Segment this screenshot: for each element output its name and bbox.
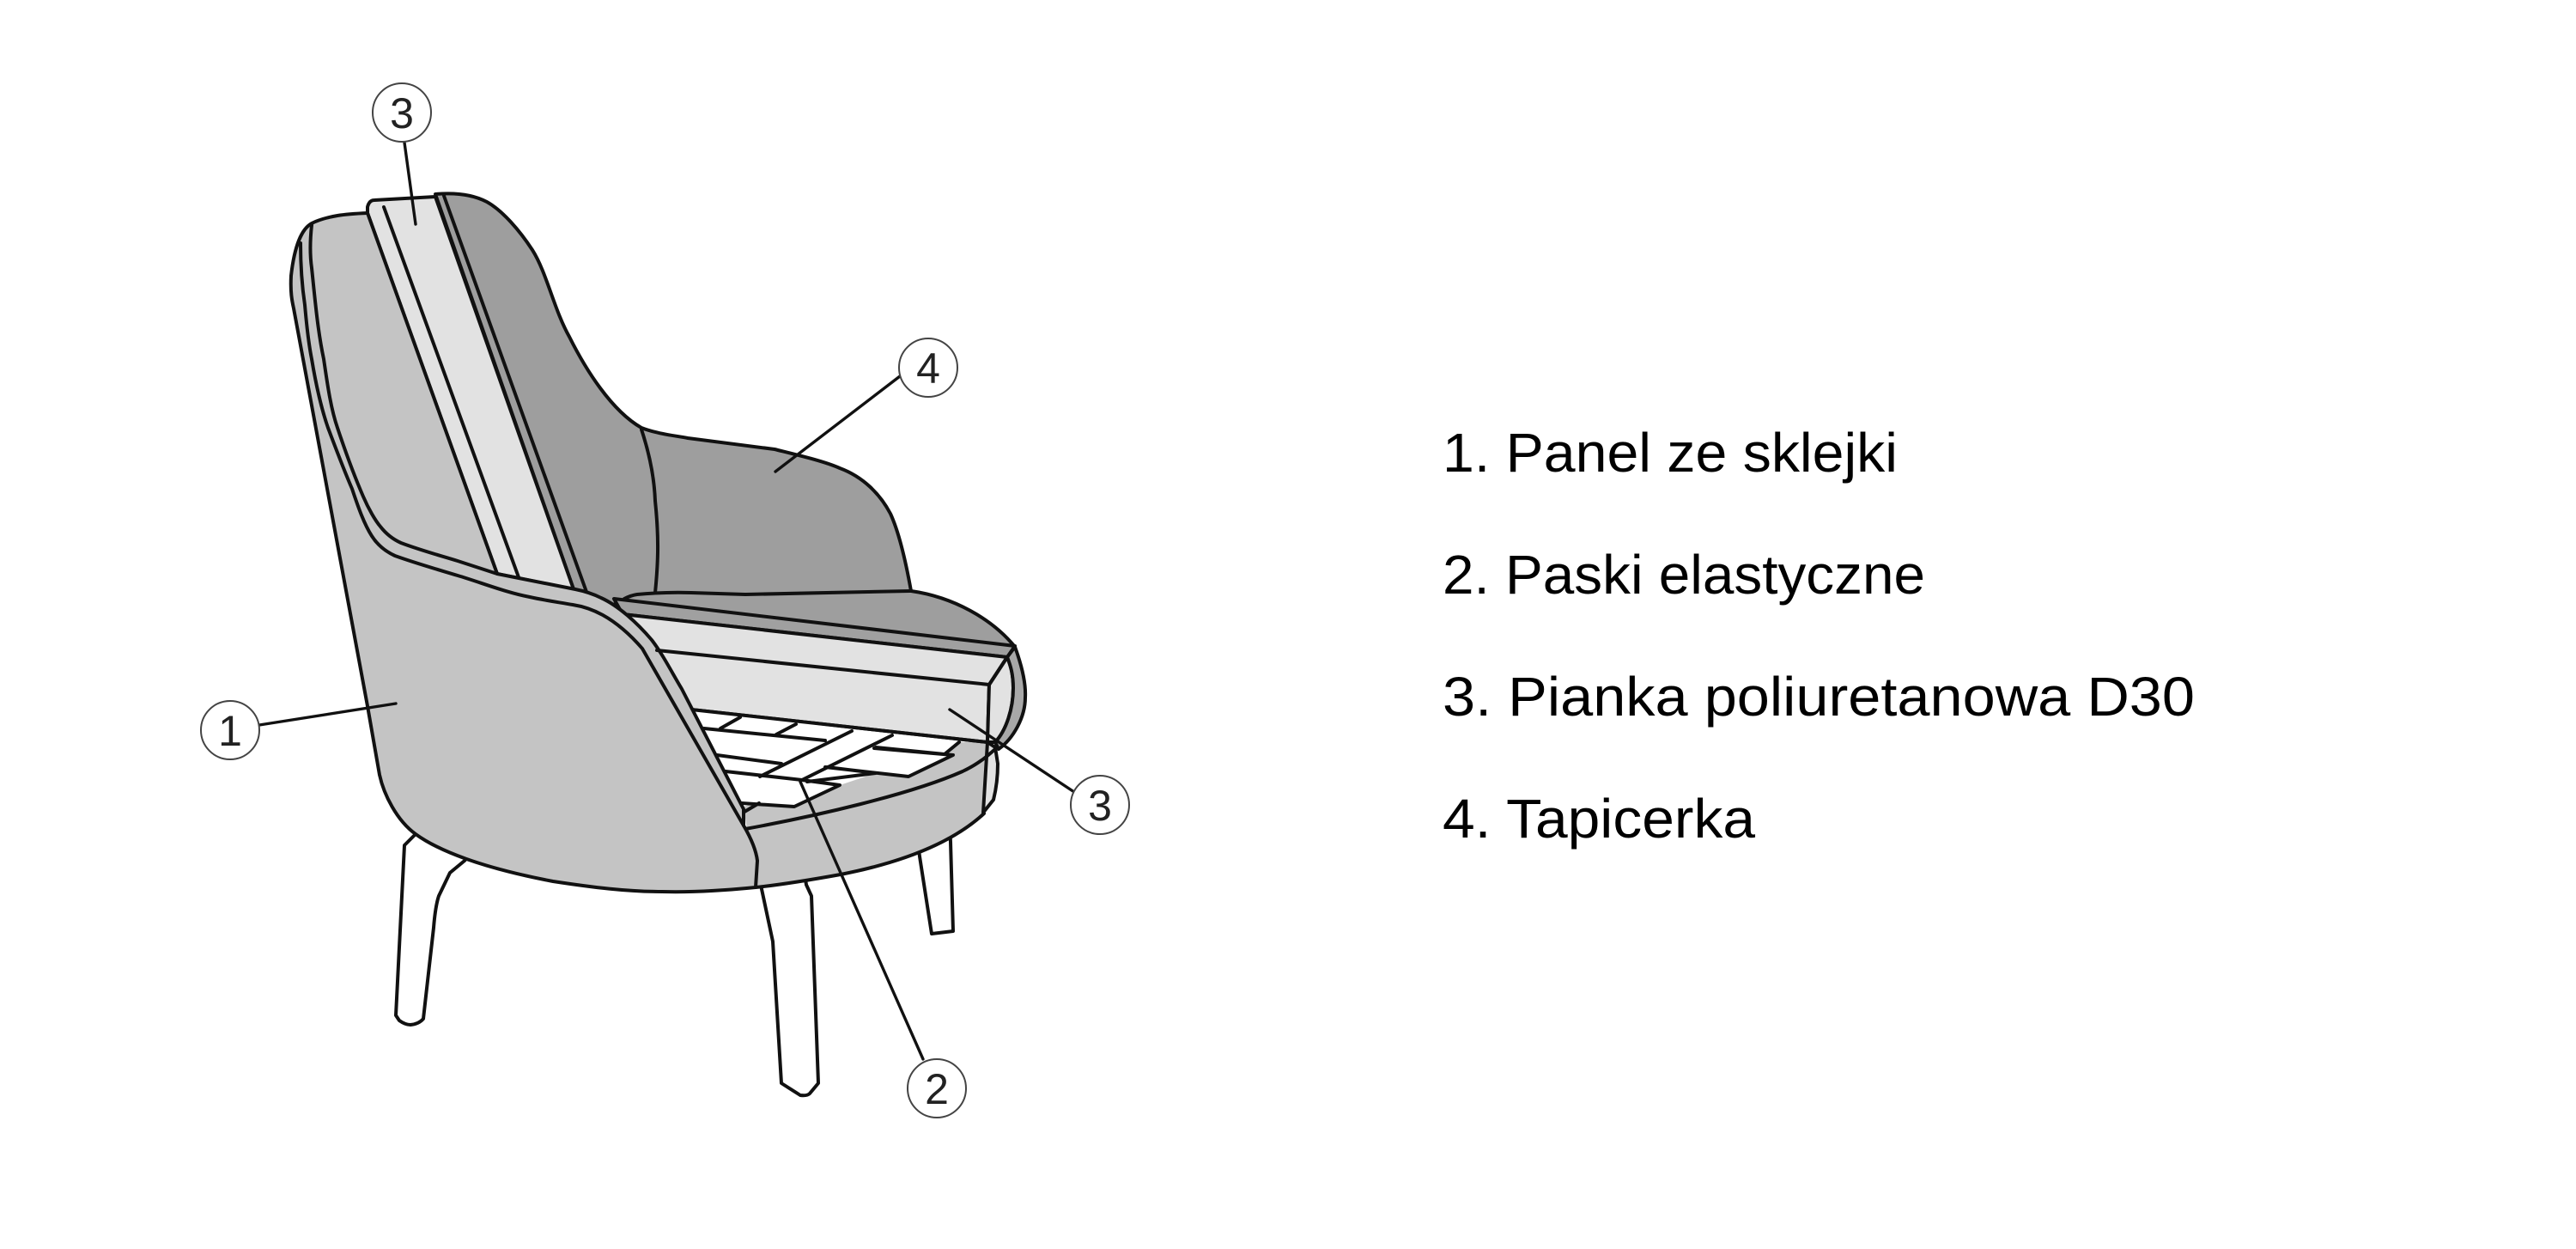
side upholstery strip [995, 647, 1025, 749]
legend list [1443, 422, 2195, 850]
panel inner contour lines [301, 225, 744, 826]
legend item 4: 4. Tapicerka [1443, 788, 1755, 850]
callout 1: plywood panel: 1 [218, 707, 242, 755]
callout 2: elastic straps: 2 [925, 1065, 949, 1113]
foam strip below rim [983, 742, 998, 813]
legend item 1: 1. Panel ze sklejki [1443, 422, 1898, 484]
elastic straps [691, 710, 987, 812]
seat foam corner [987, 657, 1013, 742]
callout 1: plywood panel [201, 701, 396, 759]
callout 4: upholstery [775, 338, 957, 472]
callout 4: upholstery: 4 [916, 344, 940, 393]
legend item 3: 3. Pianka poliuretanowa D30 [1443, 666, 2195, 728]
callout 3: back foam [373, 83, 431, 224]
callout 2: elastic straps [800, 782, 966, 1118]
seat base rim [744, 742, 998, 887]
upholstery band along seat front [614, 599, 1015, 657]
seat foam block [614, 612, 1007, 742]
upholstery layer: back, arm and seat [435, 193, 1015, 647]
callout 3: seat foam [950, 710, 1129, 834]
back crease and strip lines [384, 196, 910, 599]
left front leg [396, 825, 472, 1025]
seat foam upper edge [657, 650, 1007, 685]
callout 3: back foam: 3 [390, 89, 414, 137]
outer side panel [291, 213, 757, 892]
armchair cross-section [291, 193, 1025, 1095]
back right leg [917, 825, 953, 934]
legend item 2: 2. Paski elastyczne [1443, 544, 1925, 606]
centre front leg [756, 863, 818, 1095]
back foam layer [368, 197, 574, 589]
callout 3: seat foam: 3 [1088, 782, 1112, 830]
rim edge line [745, 749, 995, 829]
